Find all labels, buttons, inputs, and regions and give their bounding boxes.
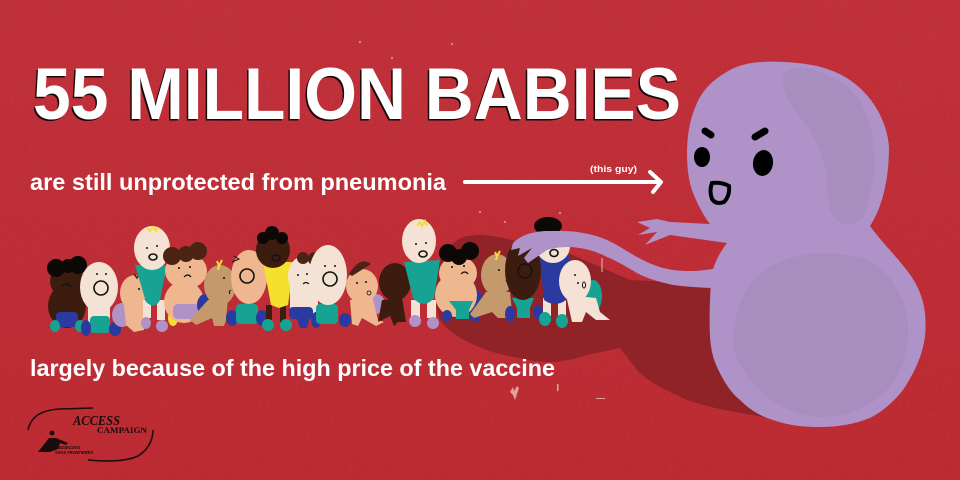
row of babies [47, 217, 610, 336]
baby 6 [190, 260, 236, 326]
title: 55 MILLION BABIES [32, 56, 680, 136]
subtitle: unprotected: are still unprotected from pneumonia [30, 169, 446, 195]
baby 3 [112, 273, 150, 332]
baby 7 [226, 250, 268, 326]
monster long arm [511, 231, 720, 288]
subtitle: vaccine price: largely because of the high price of the vaccine [30, 355, 555, 381]
baby 18 [559, 260, 610, 322]
baby 5 [163, 242, 207, 326]
baby 12 [378, 263, 411, 326]
logo: Access Campaign: SANS FRONTIERES [55, 450, 94, 456]
logo: Access Campaign: MEDECINS [55, 445, 81, 451]
baby 8 [256, 226, 294, 331]
baby 16 [505, 240, 543, 319]
title: 55 MILLION BABIES [33, 54, 681, 135]
baby 1 [47, 256, 87, 332]
logo: Access Campaign: CAMPAIGN [97, 426, 147, 435]
arrow label: (this guy) [590, 164, 637, 175]
baby 17 [534, 217, 570, 328]
monster face [694, 131, 775, 203]
baby 2 [80, 262, 121, 336]
baby 15 [470, 251, 515, 322]
baby 10 [309, 245, 351, 327]
monster body and head [637, 62, 926, 427]
icon: MSF running man [38, 430, 68, 452]
purple monster [511, 62, 926, 427]
baby 14 [435, 242, 483, 322]
baby 13 [402, 219, 440, 329]
logo: Access Campaign: ACCESS [72, 413, 120, 428]
monster shadow [435, 235, 763, 417]
monster head shade [783, 68, 874, 225]
scratches [359, 41, 605, 400]
arrow to monster [465, 172, 661, 192]
baby 11 [346, 262, 385, 326]
logo: Access Campaign [28, 408, 153, 461]
baby 4 [134, 226, 170, 332]
baby 9 [288, 252, 322, 328]
monster belly shade [733, 253, 908, 417]
